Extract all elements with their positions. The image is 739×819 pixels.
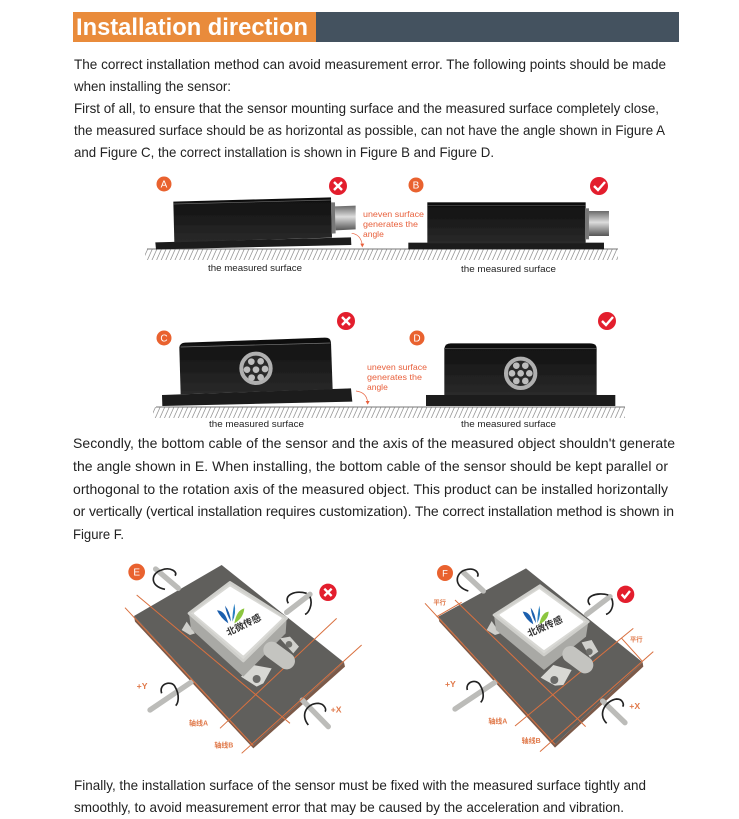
caption C: the measured surface: [209, 419, 304, 430]
uneven surface note C: angle: [367, 382, 388, 392]
caption B: the measured surface: [461, 264, 556, 275]
intro text block: [73, 56, 666, 160]
middle text block: orthogonal to the rotation axis of the measured object. This product can be installed horizontally: [73, 481, 668, 497]
section heading bar: [73, 12, 679, 42]
connector D: [506, 359, 535, 388]
rotation rods F: [455, 572, 625, 723]
badge B: [408, 178, 424, 192]
axis labels F: 轴线B: [522, 736, 541, 745]
axis lines E: [125, 595, 362, 753]
intro text block: The correct installation method can avoid measurement error. The following points should be made: [74, 56, 666, 72]
middle text block: Secondly, the bottom cable of the sensor and the axis of the measured object shouldn't generate: [73, 435, 675, 451]
closing text block: [74, 777, 646, 815]
axis lines F: [425, 600, 653, 752]
sensor device E: [182, 582, 299, 687]
rotation arrows F: [457, 569, 623, 723]
sensor body C: [179, 338, 333, 394]
ground surface middle row: [153, 407, 625, 418]
uneven surface note A: [363, 209, 424, 239]
middle text block: the angle shown in E. When installing, the bottom cable of the sensor should be kept parallel or: [73, 458, 668, 474]
sensor body A: [173, 197, 332, 242]
intro text block: and Figure C, the correct installation is shown in Figure B and Figure D.: [74, 144, 494, 160]
middle text block: or vertically (vertical installation requires customization). The correct installation method is shown in: [73, 503, 674, 519]
axis labels E: +Y: [137, 681, 148, 691]
badge E: E: [133, 568, 140, 579]
figure E: incorrect mounting perspective view: [125, 564, 362, 753]
connector C: [241, 354, 271, 383]
badge C: [156, 330, 172, 346]
intro text block: the measured surface should be as horizontal as possible, can not have the angle shown in Figure A: [74, 122, 666, 138]
axis labels F: [433, 597, 643, 745]
base plate A: [155, 237, 351, 249]
error mark C: [337, 312, 355, 330]
rotation arrows E: [153, 569, 326, 725]
axis labels E: [137, 681, 342, 750]
badge E: [128, 564, 145, 580]
mounting plate F: [438, 568, 643, 748]
connector A: [331, 202, 356, 234]
sensor body B: [427, 202, 586, 243]
error mark A: [329, 177, 347, 195]
mounting plate E: [134, 565, 345, 748]
correct mark F: [617, 586, 634, 603]
figure F: correct mounting perspective view: [425, 565, 653, 752]
angle arrow C: [356, 391, 370, 405]
section heading bar: Installation direction: [76, 14, 308, 41]
ground surface top row: [145, 249, 618, 260]
badge F: F: [442, 568, 448, 578]
connector B: [585, 208, 609, 239]
uneven surface note C: generates the: [367, 372, 422, 382]
axis labels E: +X: [331, 704, 342, 714]
uneven surface note C: uneven surface: [367, 362, 427, 372]
error mark E: [319, 584, 337, 601]
axis labels E: 轴线A: [189, 719, 208, 728]
base plate B: [408, 243, 604, 249]
sensor device F: [487, 586, 598, 686]
middle text block: Figure F.: [73, 526, 124, 542]
badge F: [437, 565, 453, 581]
closing text block: smoothly, to avoid measurement error that may be caused by the acceleration and vibration.: [74, 799, 624, 815]
sensor logo E: 北微传感: [223, 609, 264, 639]
axis labels F: +X: [629, 701, 640, 711]
base plate D: [426, 395, 615, 406]
angle arrow A: [352, 233, 364, 247]
badge A: A: [161, 180, 168, 190]
badge B: B: [413, 180, 420, 192]
axis labels F: 轴线A: [488, 716, 507, 725]
badge D: [410, 330, 424, 346]
figure A: tilted sensor side view: [155, 197, 364, 249]
intro text block: First of all, to ensure that the sensor mounting surface and the measured surface completely close,: [74, 100, 659, 116]
middle text block: [73, 435, 675, 542]
intro text block: when installing the sensor:: [73, 78, 231, 94]
closing text block: Finally, the installation surface of the sensor must be fixed with the measured surface tightly and: [74, 777, 646, 793]
caption A: the measured surface: [208, 263, 302, 274]
uneven surface note A: generates the: [363, 219, 418, 229]
axis labels F: +Y: [445, 679, 456, 689]
badge A: [156, 176, 172, 192]
axis labels E: 轴线B: [214, 741, 233, 750]
uneven surface note A: angle: [363, 229, 384, 239]
base plate C: [162, 388, 352, 406]
figure D: level sensor front view: [426, 343, 615, 406]
sensor body D: [444, 343, 597, 395]
badge C: C: [160, 334, 168, 344]
caption D: the measured surface: [461, 419, 556, 430]
correct mark D: [598, 312, 616, 330]
figure B: level sensor side view: [408, 202, 609, 249]
uneven surface note C: [367, 362, 427, 392]
sensor logo F: 北微传感: [525, 611, 565, 640]
figure C: tilted sensor front view: [162, 338, 370, 406]
axis labels F: 平行: [433, 597, 447, 606]
rotation rods E: [150, 569, 328, 727]
axis labels F: 平行: [630, 635, 643, 644]
uneven surface note A: uneven surface: [363, 209, 424, 219]
badge D: D: [413, 334, 421, 344]
correct mark B: [590, 177, 608, 195]
